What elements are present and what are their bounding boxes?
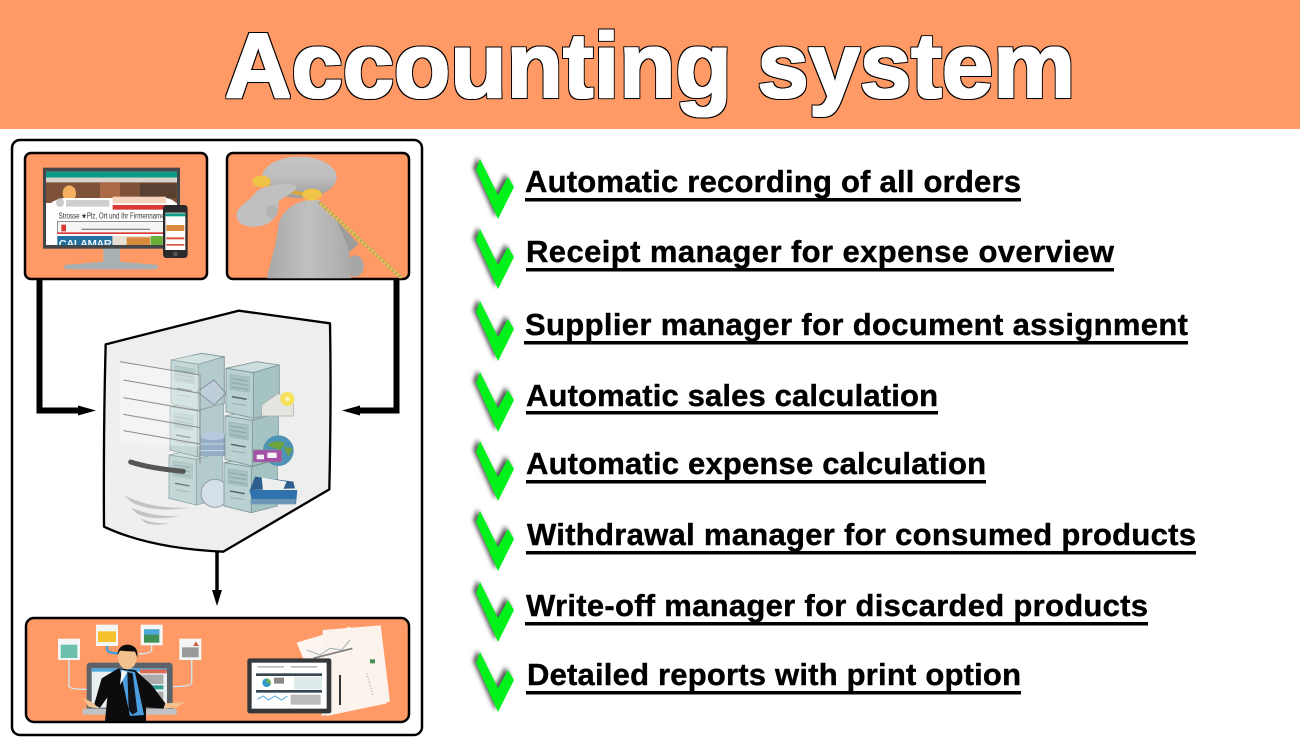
icon: tablet dashboard with printed reports (247, 625, 390, 716)
list item: expense calculation: Automatic expense calculation (526, 446, 986, 481)
list item: supplier manager (473, 299, 1188, 361)
icon: figure head (262, 157, 337, 198)
icon: figure arm (237, 184, 297, 227)
icon: picture document (141, 625, 163, 645)
icon: tablet (247, 658, 331, 713)
icon: document (197, 380, 226, 405)
list item: recording of orders: Automatic recording of all orders (525, 164, 1021, 199)
icon: telephone handle (267, 186, 312, 196)
list item: sales calculation (473, 370, 938, 432)
panel: reports (26, 618, 409, 722)
icon: telephone receiver (252, 176, 322, 201)
icon: monitor with web shop: Strosse ★Plz, Ort und Ihr Firmenname (59, 211, 165, 220)
arrow: web shop to server (40, 279, 96, 416)
icon: vent marks (123, 495, 190, 525)
icon: database stack (201, 432, 226, 456)
icon: spreadsheet document (58, 639, 80, 660)
icon: text document (179, 639, 201, 660)
title banner (0, 0, 1300, 129)
icon: smartphone (163, 205, 188, 258)
icon: businessman with laptop and documents (58, 625, 201, 721)
icon: globe left (201, 479, 229, 507)
list item: recording of orders (473, 157, 1021, 219)
list item: write-off manager (473, 580, 1148, 642)
icon: server cabinet (104, 311, 331, 552)
list: accounting features (473, 157, 1196, 712)
list item: receipt manager (473, 227, 1115, 289)
icon: grey figure on telephone (237, 157, 402, 278)
panel: phone call figure (227, 153, 409, 279)
icon: printed report pages (297, 625, 390, 716)
icon: mail envelope (262, 392, 294, 416)
icon: folder document (96, 625, 118, 646)
list item: receipt manager: Receipt manager for expense overview (526, 234, 1115, 269)
icon: connector lines (69, 645, 192, 689)
list item: withdrawal manager: Withdrawal manager for consumed products (527, 517, 1196, 552)
list item: detailed reports: Detailed reports with print option (527, 657, 1021, 692)
panel: web shop on monitor and phone (25, 153, 207, 279)
icon: front panel drive lines (120, 362, 200, 463)
icon: telephone cord (319, 202, 402, 278)
icon: figure back arm (333, 217, 364, 277)
list item: detailed reports (473, 650, 1021, 712)
icon: blue folder (249, 477, 297, 504)
translucent front panel (107, 347, 223, 548)
icon: figure body (267, 200, 351, 278)
title: Accounting system (225, 15, 1075, 117)
icon: monitor with web shop (43, 168, 180, 269)
list item: withdrawal manager (473, 509, 1196, 571)
arrow: server to reports (212, 550, 222, 606)
list item: expense calculation (473, 439, 986, 501)
icon: server rack column right (224, 362, 279, 513)
list item: supplier manager: Supplier manager for document assignment (525, 307, 1188, 342)
list item: sales calculation: Automatic sales calculation (526, 378, 938, 413)
panel: system diagram (12, 140, 422, 735)
list item: write-off manager: Write-off manager for discarded products (526, 588, 1148, 623)
icon: monitor with web shop: CALAMAR (59, 238, 112, 250)
icon: drive slot (131, 462, 183, 471)
arrow: phone orders to server (342, 279, 396, 416)
icon: server rack column left (169, 353, 224, 505)
icon: globe and window (253, 435, 294, 466)
icon: laptop (83, 663, 177, 715)
icon: businessman (83, 645, 185, 721)
